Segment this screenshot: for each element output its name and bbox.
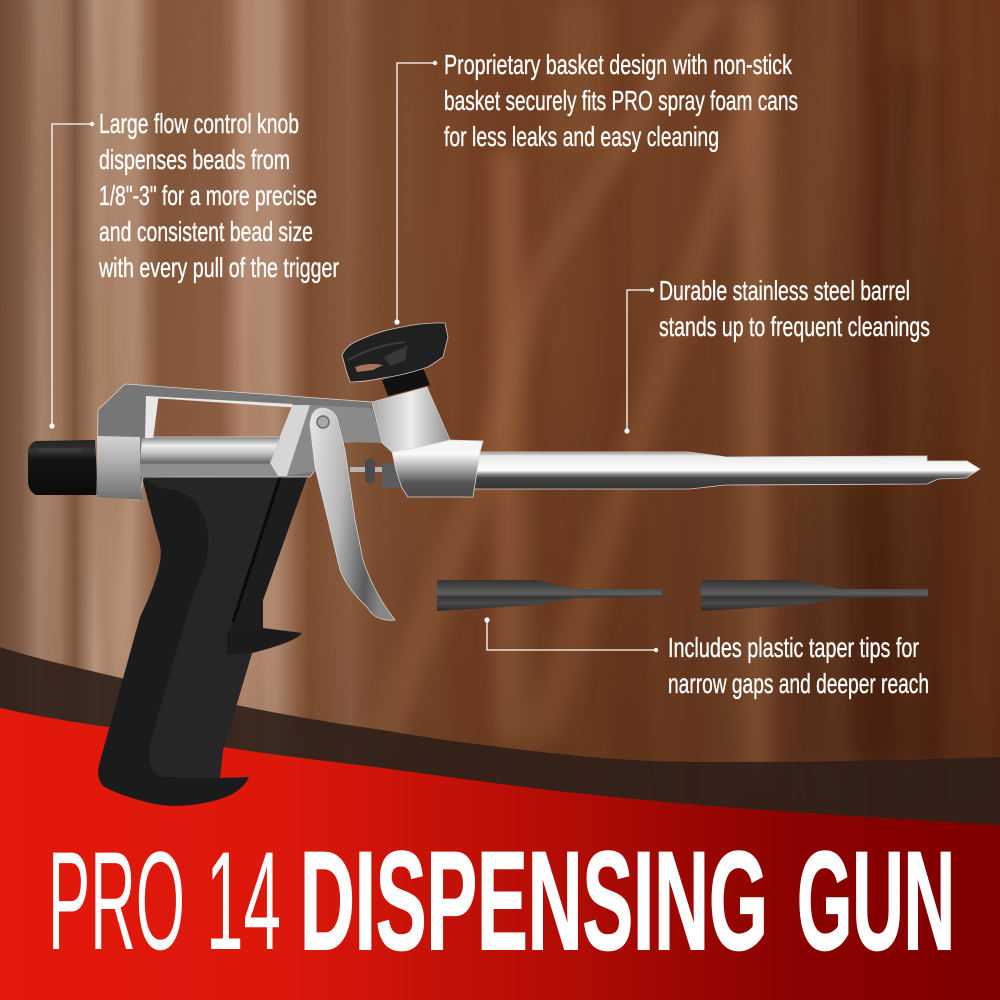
- callout: basket design: [394, 49, 798, 325]
- gun: main cylinder: [140, 438, 280, 463]
- callout text: [668, 632, 929, 699]
- gun: lower rail: [140, 464, 278, 477]
- gun: grip edge lines: [233, 477, 280, 622]
- callout text: [444, 49, 798, 152]
- callout text: [98, 108, 339, 283]
- callout text: Large flow control knob: [99, 108, 299, 139]
- callout: stainless barrel: [624, 275, 930, 434]
- gun: flow control knob: [28, 440, 98, 495]
- callout text: 1/8"-3" for a more precise: [99, 180, 317, 211]
- callout text: Proprietary basket design with non-stick: [444, 49, 793, 80]
- red wave footer: [0, 708, 1000, 1000]
- leader line: [484, 617, 658, 652]
- callout text: dispenses beads from: [99, 144, 290, 175]
- gun: barrel: [470, 452, 980, 489]
- leader line: [394, 61, 437, 325]
- gun: grip inner panel: [142, 477, 280, 778]
- callout text: with every pull of the trigger: [98, 252, 339, 283]
- gun: lower left block: [97, 436, 143, 500]
- title: [48, 822, 955, 979]
- gun: basket stem: [382, 368, 430, 396]
- leader line: [624, 288, 654, 434]
- callout text: basket securely fits PRO spray foam cans: [444, 85, 798, 116]
- callout: taper tips: [484, 617, 929, 699]
- gun: valve housing: [372, 387, 450, 452]
- title: PRO: [48, 822, 185, 979]
- gun: strut right panel: [280, 405, 382, 477]
- taper tip two: [701, 580, 928, 611]
- gun: black grip: [98, 477, 307, 806]
- translucent dark wave band: [0, 647, 1000, 900]
- gun: grip side strip: [227, 477, 307, 632]
- callout text: [659, 275, 930, 342]
- title: 14: [206, 822, 281, 979]
- dispensing gun: [28, 323, 980, 806]
- callout: flow control knob: [49, 108, 339, 429]
- taper tip one: [437, 580, 662, 611]
- gun: valve rod: [350, 458, 404, 488]
- leader line: [49, 122, 94, 429]
- plastic taper tips: [437, 580, 928, 611]
- gun: foam can basket: [342, 323, 448, 382]
- callout text: and consistent bead size: [99, 216, 313, 247]
- gun: trigger: [310, 408, 395, 620]
- callout text: for less leaks and easy cleaning: [444, 121, 719, 152]
- gun: upper frame: [97, 384, 400, 500]
- gun: diagonal strut: [270, 405, 310, 476]
- gun: barrel coupling: [392, 440, 483, 497]
- gun: window highlight: [145, 396, 293, 438]
- gun: trigger pivot: [317, 416, 329, 428]
